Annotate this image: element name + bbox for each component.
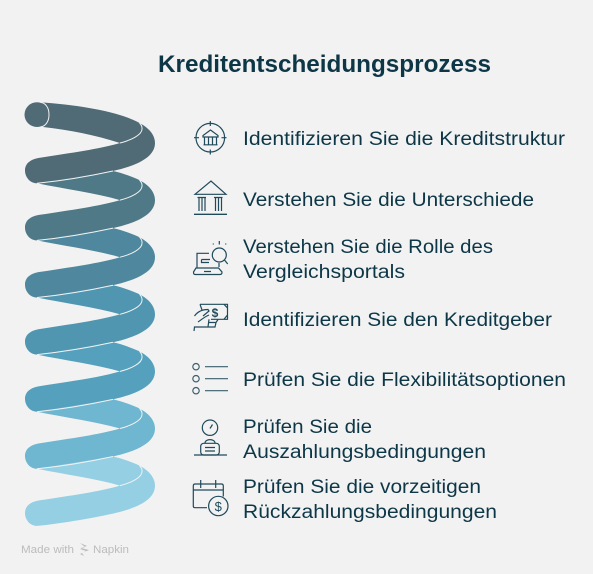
coil 2 bbox=[25, 171, 155, 240]
label: Prüfen Sie die Flexibilitätsoptionen bbox=[243, 370, 566, 391]
coil 6 bbox=[25, 399, 155, 469]
step 2 bbox=[194, 181, 534, 214]
icon: laptop with magnifier bbox=[194, 241, 228, 274]
label: Vergleichsportals bbox=[243, 262, 405, 283]
icon: coin dollar: $ bbox=[215, 499, 223, 514]
coil 1 bbox=[25, 102, 155, 183]
step 3 bbox=[194, 237, 493, 283]
footer credit: Napkin bbox=[93, 544, 129, 556]
label: Identifizieren Sie die Kreditstruktur bbox=[243, 129, 566, 150]
label: Rückzahlungsbedingungen bbox=[243, 502, 497, 523]
label: Verstehen Sie die Unterschiede bbox=[243, 190, 534, 211]
coil 5 bbox=[25, 342, 155, 412]
step 1 bbox=[194, 121, 566, 154]
icon: clock and payout bbox=[194, 420, 227, 455]
icon: calendar with coin bbox=[193, 480, 228, 516]
icon: hand holding money bbox=[194, 304, 228, 331]
footer credit: Made with bbox=[21, 544, 74, 556]
footer credit bbox=[21, 543, 129, 556]
label: Identifizieren Sie den Kreditgeber bbox=[243, 310, 553, 331]
label: Prüfen Sie die bbox=[243, 417, 372, 438]
step 5 bbox=[193, 364, 566, 394]
icon: options list bbox=[193, 364, 228, 394]
step 7 bbox=[193, 477, 497, 523]
coil 7 bbox=[25, 456, 155, 526]
icon: napkin logo bbox=[80, 543, 89, 556]
icon: bank building bbox=[194, 181, 227, 214]
step 6 bbox=[194, 417, 486, 463]
spiral spring graphic bbox=[24, 102, 155, 526]
label: Auszahlungsbedingungen bbox=[243, 442, 486, 463]
coil top opening bbox=[24, 102, 50, 127]
label: Verstehen Sie die Rolle des bbox=[243, 237, 493, 258]
icon: bank in target bbox=[194, 121, 226, 154]
step 4 bbox=[194, 304, 553, 331]
icon: dollar: $ bbox=[212, 306, 219, 320]
label: Prüfen Sie die vorzeitigen bbox=[243, 477, 481, 498]
coil 4 bbox=[25, 285, 155, 355]
coil highlights bbox=[37, 123, 142, 486]
coil 3 bbox=[25, 228, 155, 298]
title: Kreditentscheidungsprozess bbox=[158, 51, 491, 78]
